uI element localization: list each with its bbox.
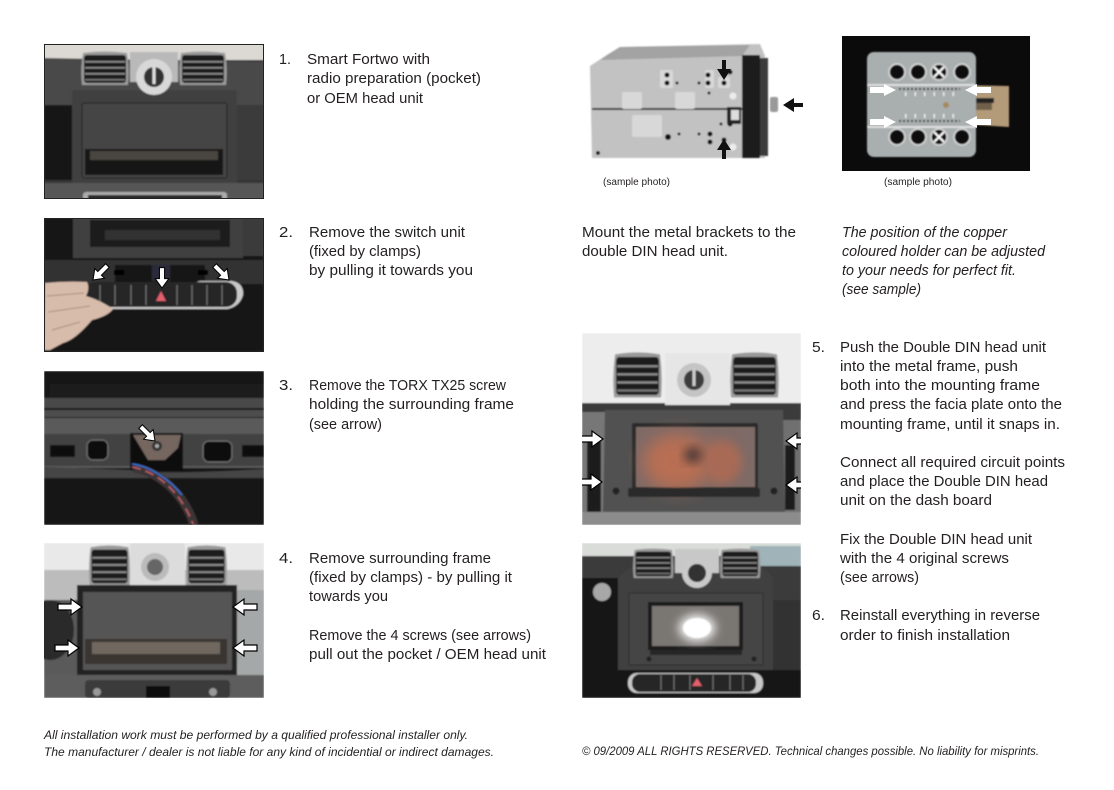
photo 5: head unit in frame <box>578 333 810 525</box>
photo 6: finished installation <box>582 543 801 698</box>
text: mount brackets: Mount the metal brackets to the <box>582 225 796 241</box>
text: copper holder note: The position of the copper <box>842 225 1008 241</box>
text: copper holder note: coloured holder can be adjusted <box>842 244 1046 260</box>
step 3 text: holding the surrounding frame <box>309 397 514 413</box>
step 4 text: towards you <box>309 589 388 605</box>
step 4 text: pull out the pocket / OEM head unit <box>309 647 546 663</box>
photo 2: removing switch unit <box>44 218 264 352</box>
footer copyright: © 09/2009 ALL RIGHTS RESERVED. Technical changes possible. No liability for misprints. <box>582 744 1039 758</box>
step 4 text <box>279 551 546 663</box>
photo 4: pocket with frame removed <box>26 543 264 698</box>
step 1 text: radio preparation (pocket) <box>307 71 481 87</box>
step 6 text: order to finish installation <box>840 628 1010 644</box>
text: copper holder note <box>842 225 1046 298</box>
text: copper holder note: to your needs for perfect fit. <box>842 263 1016 279</box>
text: mount brackets <box>582 225 796 260</box>
step 4 text: Remove the 4 screws (see arrows) <box>309 628 531 644</box>
step 2 text: by pulling it towards you <box>309 263 473 279</box>
step 1 text <box>279 52 481 107</box>
step 4 text: Remove surrounding frame <box>309 551 491 567</box>
step 1 text: Smart Fortwo with <box>307 52 430 68</box>
step 6 text: 6. <box>812 608 825 624</box>
photo 3: TORX screw behind frame <box>44 371 264 525</box>
step 2 text: (fixed by clamps) <box>309 244 421 260</box>
step 6 text <box>812 608 1040 644</box>
step 2 text: 2. <box>279 225 293 241</box>
photo 1: dashboard with pocket <box>44 44 264 200</box>
step 5 text: Connect all required circuit points <box>840 455 1065 471</box>
footer disclaimer: All installation work must be performed by a qualified professional installer only. <box>43 728 468 742</box>
sample photo: double DIN unit side view <box>590 44 803 159</box>
step 5 text: into the metal frame, push <box>840 359 1018 375</box>
step 5 text: Push the Double DIN head unit <box>840 340 1046 356</box>
step 5 text: mounting frame, until it snaps in. <box>840 417 1060 433</box>
step 5 text: (see arrows) <box>840 570 919 586</box>
step 3 text <box>279 378 514 433</box>
step 5 text: and press the facia plate onto the <box>840 397 1062 413</box>
step 5 text: both into the mounting frame <box>840 378 1040 394</box>
step 2 text <box>279 225 473 279</box>
step 4 text: 4. <box>279 551 293 567</box>
step 2 text: Remove the switch unit <box>309 225 465 241</box>
step 5 text: Fix the Double DIN head unit <box>840 532 1032 548</box>
step 1 text: or OEM head unit <box>307 91 423 107</box>
text: copper holder note: (see sample) <box>842 282 921 298</box>
step 6 text: Reinstall everything in reverse <box>840 608 1040 624</box>
text: mount brackets: double DIN head unit. <box>582 244 728 260</box>
step 3 text: Remove the TORX TX25 screw <box>309 378 507 394</box>
caption: sample photo left: (sample photo) <box>603 177 670 188</box>
step 4 text: (fixed by clamps) - by pulling it <box>309 570 512 586</box>
footer disclaimer: The manufacturer / dealer is not liable for any kind of incidential or indirect damages. <box>44 745 494 759</box>
sample photo: metal bracket with copper holder <box>842 36 1030 171</box>
step 5 text: and place the Double DIN head <box>840 474 1048 490</box>
footer disclaimer <box>43 728 494 759</box>
step 5 text: with the 4 original screws <box>839 551 1009 567</box>
step 5 text: 5. <box>812 340 825 356</box>
step 3 text: (see arrow) <box>309 417 382 433</box>
step 5 text <box>812 340 1065 586</box>
caption: sample photo right: (sample photo) <box>884 177 952 188</box>
step 5 text: unit on the dash board <box>840 493 992 509</box>
step 3 text: 3. <box>279 378 293 394</box>
step 1 text: 1. <box>279 52 291 68</box>
